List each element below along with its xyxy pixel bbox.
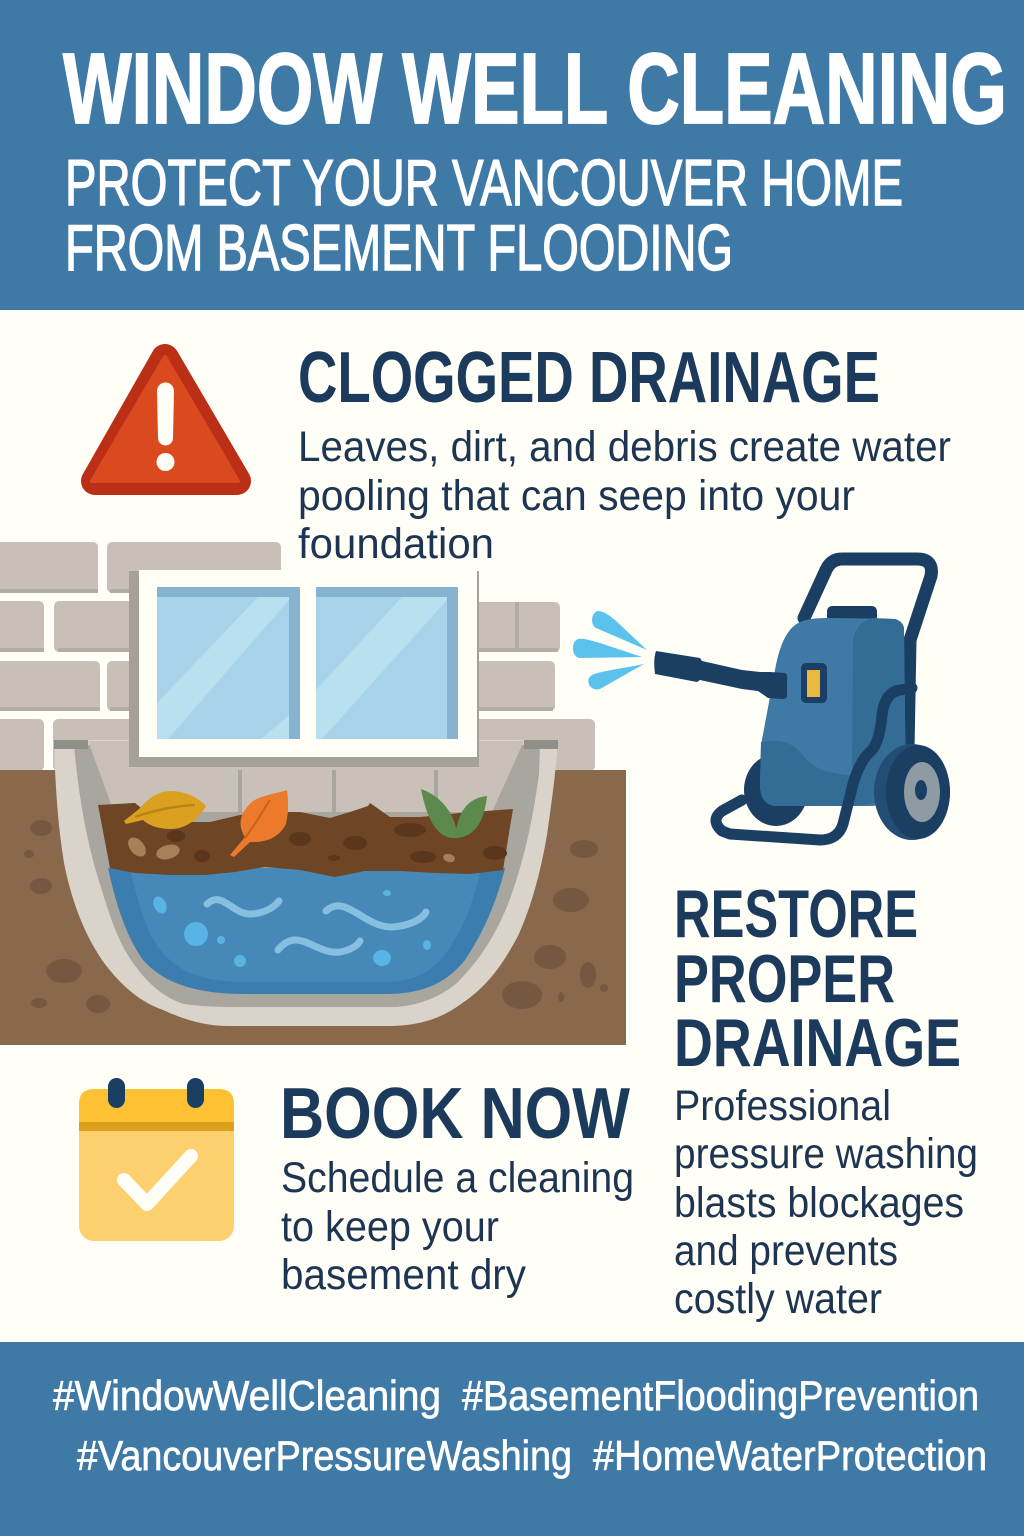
text: book now description: Schedule a cleaning <box>281 1154 634 1202</box>
pebbles <box>125 834 456 863</box>
heading: restore proper drainage: RESTORE <box>674 876 918 952</box>
ground <box>0 770 626 1045</box>
hashtags: #HomeWaterProtection <box>593 1432 987 1479</box>
debris layer <box>98 789 513 877</box>
text: book now description: to keep your <box>281 1203 499 1251</box>
heading: restore proper drainage: PROPER <box>674 941 895 1017</box>
text: restore description: blasts blockages <box>674 1179 964 1227</box>
text: clogged drainage description: pooling that can seep into your <box>298 472 855 520</box>
window <box>129 570 479 767</box>
water <box>108 868 505 994</box>
section: clogged drainage <box>298 338 951 568</box>
subtitle: FROM BASEMENT FLOODING <box>65 211 733 284</box>
hashtags: #VancouverPressureWashing <box>77 1432 572 1479</box>
text: clogged drainage description <box>298 423 951 568</box>
footer banner <box>0 1342 1024 1536</box>
gauge <box>801 663 827 703</box>
water ripples <box>207 900 426 952</box>
brick wall <box>0 542 595 771</box>
text: restore description <box>674 1082 978 1323</box>
subtitle <box>65 146 903 284</box>
right pane <box>316 587 458 739</box>
water bubbles <box>151 890 431 967</box>
spray wand <box>654 651 787 699</box>
text: restore description: Professional <box>674 1082 891 1130</box>
text: book now description <box>281 1154 634 1299</box>
washer body <box>760 618 906 806</box>
heading: book now: BOOK NOW <box>280 1074 630 1154</box>
text: restore description: costly water <box>674 1275 882 1323</box>
leaf: yellow <box>124 791 206 829</box>
right wheel <box>874 744 950 840</box>
section: book now <box>280 1074 634 1299</box>
left pane <box>157 587 300 739</box>
text: book now description: basement dry <box>281 1251 526 1299</box>
top cap <box>827 606 877 622</box>
illustration: window well cross-section <box>0 542 626 1045</box>
icon: calendar with check <box>79 1078 234 1241</box>
hashtags: #WindowWellCleaning <box>53 1372 441 1419</box>
left wheel <box>744 754 808 826</box>
well liner <box>54 740 558 1026</box>
text: restore description: pressure washing <box>674 1130 978 1178</box>
icon: warning triangle <box>92 357 238 481</box>
hashtags <box>53 1372 987 1479</box>
leaf: green <box>421 789 487 838</box>
leaf: orange <box>230 790 288 857</box>
text: clogged drainage description: foundation <box>298 520 494 568</box>
wheeled frame <box>716 688 912 840</box>
text: clogged drainage description: Leaves, dirt, and debris create water <box>298 423 951 471</box>
washer handle <box>804 559 931 750</box>
header banner <box>0 0 1024 310</box>
illustration: pressure washer <box>654 559 950 840</box>
heading: restore proper drainage <box>674 876 961 1081</box>
icon: water spray <box>573 611 647 689</box>
hashtags: #BasementFloodingPrevention <box>462 1372 979 1419</box>
text: restore description: and prevents <box>674 1227 898 1275</box>
section: restore proper drainage <box>674 876 978 1323</box>
